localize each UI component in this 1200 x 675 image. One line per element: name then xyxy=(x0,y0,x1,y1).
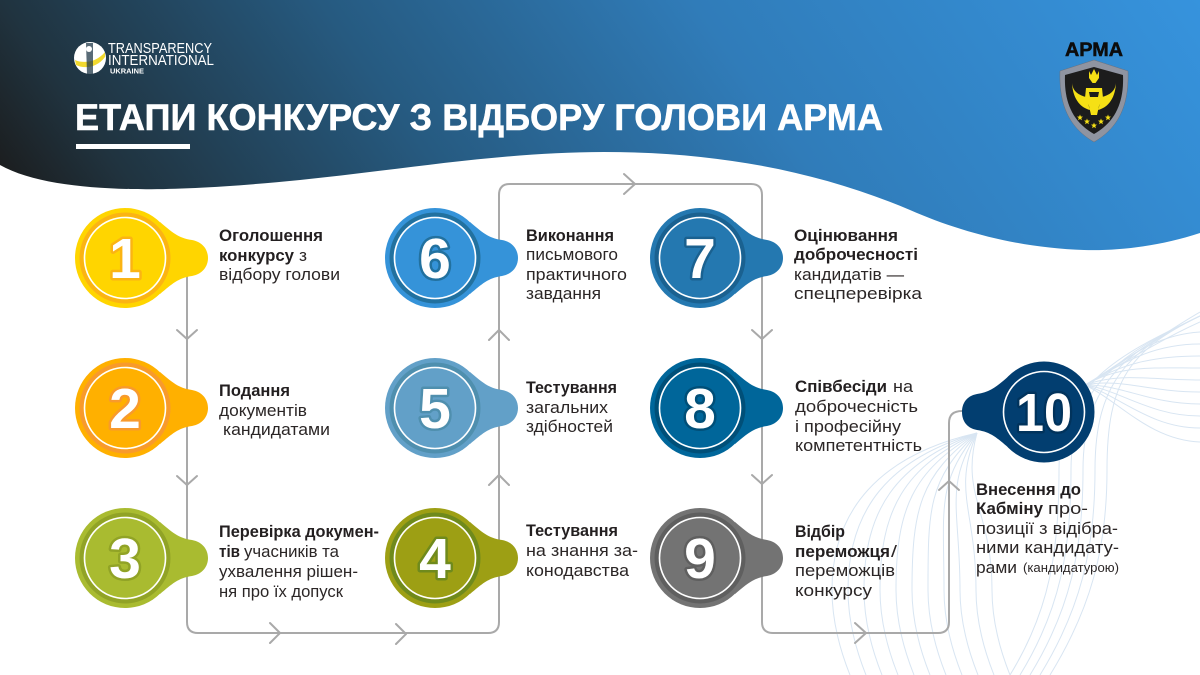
step 1 text: з xyxy=(299,246,307,265)
step 6 badge xyxy=(385,208,518,308)
step 7 text: Оцінювання xyxy=(794,226,898,245)
step 2 text: кандидатами xyxy=(223,420,330,439)
step 7 text: доброчесності xyxy=(794,245,918,264)
step 10 text: (кандидатурою) xyxy=(1023,561,1119,575)
step 5 badge xyxy=(385,358,518,458)
step 2 text xyxy=(219,381,330,439)
step 4 badge: 4 xyxy=(419,527,451,591)
step 10 badge: 10 xyxy=(1016,383,1072,443)
step 10 text: Кабміну xyxy=(976,499,1044,518)
step 2 badge: 2 xyxy=(109,377,141,441)
step 5 text: загальних xyxy=(526,398,609,417)
step 8 text: на xyxy=(893,377,914,396)
logo: ARMA shield xyxy=(1060,40,1128,142)
step 2 text: документів xyxy=(219,401,307,420)
step 10 text: ними кандидату- xyxy=(976,538,1119,557)
step 7 text: спецперевірка xyxy=(794,284,923,303)
step 3 text: ня про їх допуск xyxy=(219,582,344,601)
step 3 text: ухвалення рішен- xyxy=(219,562,358,581)
step 2 text: Подання xyxy=(219,381,290,400)
step 6 text: письмового xyxy=(526,245,618,264)
step 3 badge: 3 xyxy=(109,527,141,591)
connector lines and arrows xyxy=(177,174,962,644)
step 8 text: Співбесіди xyxy=(795,377,887,396)
step 3 badge xyxy=(75,508,208,608)
step 9 text: конкурсу xyxy=(795,581,873,600)
step 7 text xyxy=(794,226,923,303)
step 10 text: рами xyxy=(976,558,1017,577)
logo: Transparency International Ukraine: TRANSPARENCY xyxy=(108,41,212,57)
step 6 text: практичного xyxy=(526,265,627,284)
logo: Transparency International Ukraine: INTERNATIONAL xyxy=(108,53,214,69)
step 5 text xyxy=(526,378,617,436)
step 1 text: конкурсу xyxy=(219,246,295,265)
step 6 badge: 6 xyxy=(419,227,451,291)
header wave background xyxy=(0,0,1200,250)
step 10 text: Внесення до xyxy=(976,480,1081,499)
step 8 badge xyxy=(650,358,783,458)
step 1 text: відбору голови xyxy=(219,265,340,284)
step 4 badge xyxy=(385,508,518,608)
step 7 badge: 7 xyxy=(684,227,716,291)
step 9 text: переможців xyxy=(795,561,895,580)
step 9 text xyxy=(795,522,897,600)
logo: Transparency International Ukraine xyxy=(74,41,214,76)
step 8 badge: 8 xyxy=(684,377,716,441)
step 9 text: Відбір xyxy=(795,522,845,541)
step 10 text: про- xyxy=(1048,499,1088,518)
step 1 badge: 1 xyxy=(109,227,141,291)
step 8 text: і професійну xyxy=(795,417,902,436)
step 4 text: конодавства xyxy=(526,561,630,580)
step 10 badge xyxy=(962,362,1094,462)
step 7 text: кандидатів — xyxy=(794,265,904,284)
step 4 text: Тестування xyxy=(526,521,618,540)
step 3 text: тів xyxy=(219,542,240,561)
step 4 text: на знання за- xyxy=(526,541,638,560)
step 5 text: здібностей xyxy=(526,417,613,436)
step 2 badge xyxy=(75,358,208,458)
step 5 text: Тестування xyxy=(526,378,617,397)
step 4 text xyxy=(526,521,638,580)
step 6 text: завдання xyxy=(526,284,601,303)
logo: ARMA shield: АРМА xyxy=(1065,40,1123,61)
step 3 text: учасників та xyxy=(244,542,340,561)
step 9 badge xyxy=(650,508,783,608)
step 7 badge xyxy=(650,208,783,308)
step 6 text xyxy=(526,226,627,303)
title: ЕТАПИ КОНКУРСУ З ВІДБОРУ ГОЛОВИ АРМА xyxy=(75,97,883,138)
step 5 badge: 5 xyxy=(419,377,451,441)
logo: Transparency International Ukraine: UKRAINE xyxy=(110,68,144,76)
step 8 text: компетентність xyxy=(795,436,922,455)
step 8 text xyxy=(795,377,922,455)
step 9 text: / xyxy=(891,542,897,561)
step 10 text: позиції з відібра- xyxy=(976,519,1118,538)
step 1 badge xyxy=(75,208,208,308)
step 6 text: Виконання xyxy=(526,226,614,245)
step 3 text xyxy=(219,522,379,601)
step 10 text xyxy=(976,480,1119,577)
step 9 text: переможця xyxy=(795,542,890,561)
step 8 text: доброчесність xyxy=(795,397,918,416)
step 3 text: Перевірка докумен- xyxy=(219,522,379,541)
step 1 text xyxy=(219,226,340,284)
step 9 badge: 9 xyxy=(684,527,716,591)
step 1 text: Оголошення xyxy=(219,226,323,245)
